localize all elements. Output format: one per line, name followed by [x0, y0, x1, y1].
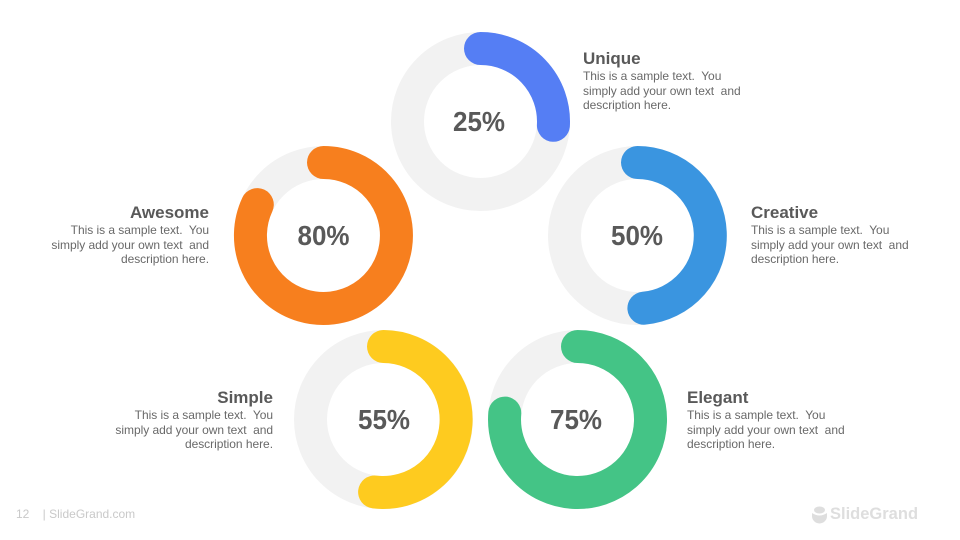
logo wordmark: SlideGrand	[830, 505, 918, 523]
donut: Elegant 75%: 75%	[550, 404, 602, 435]
text block: Creative: This is a sample text. You	[751, 223, 889, 237]
text block: Elegant: description here.	[687, 437, 775, 451]
text block: Creative	[751, 203, 909, 266]
text block: Simple: Simple	[217, 388, 273, 407]
text block: Unique: description here.	[583, 98, 671, 112]
text block: Simple: This is a sample text. You	[135, 408, 273, 422]
donut: Awesome 80%	[250, 162, 396, 308]
donut: Unique 25%	[408, 48, 554, 194]
donut: Simple 55%	[310, 346, 456, 492]
text block: Simple: simply add your own text and	[115, 422, 273, 436]
text block: Simple	[115, 388, 273, 451]
text block: Simple: description here.	[185, 437, 273, 451]
text block: Unique: Unique	[583, 49, 641, 68]
donut: Creative 50%: 50%	[611, 220, 663, 251]
text block: Unique: simply add your own text and	[583, 84, 741, 98]
donut: Awesome 80%: 80%	[298, 220, 350, 251]
page number and site: 12 | SlideGrand.com	[16, 507, 135, 521]
text block: Elegant: This is a sample text. You	[687, 408, 825, 422]
text block: Creative: simply add your own text and	[751, 238, 909, 252]
donut: Elegant 75%	[504, 346, 651, 493]
text block: Elegant	[687, 388, 845, 451]
text block: Unique	[583, 49, 741, 112]
text block: Awesome	[51, 203, 209, 266]
text block: Creative: Creative	[751, 203, 818, 222]
icon: logo mark	[812, 506, 827, 524]
text block: Creative: description here.	[751, 252, 839, 266]
text block: Elegant: simply add your own text and	[687, 422, 845, 436]
donut: Unique 25%: 25%	[453, 106, 505, 137]
text block: Awesome: description here.	[121, 252, 209, 266]
text block: Elegant: Elegant	[687, 388, 748, 407]
text block: Awesome: simply add your own text and	[51, 238, 209, 252]
donut: Creative 50%	[564, 162, 710, 308]
text block: Awesome: Awesome	[130, 203, 209, 222]
text block: Unique: This is a sample text. You	[583, 69, 721, 83]
text block: Awesome: This is a sample text. You	[71, 223, 209, 237]
logo: SlideGrand	[812, 505, 918, 524]
donut: Simple 55%: 55%	[358, 404, 410, 435]
